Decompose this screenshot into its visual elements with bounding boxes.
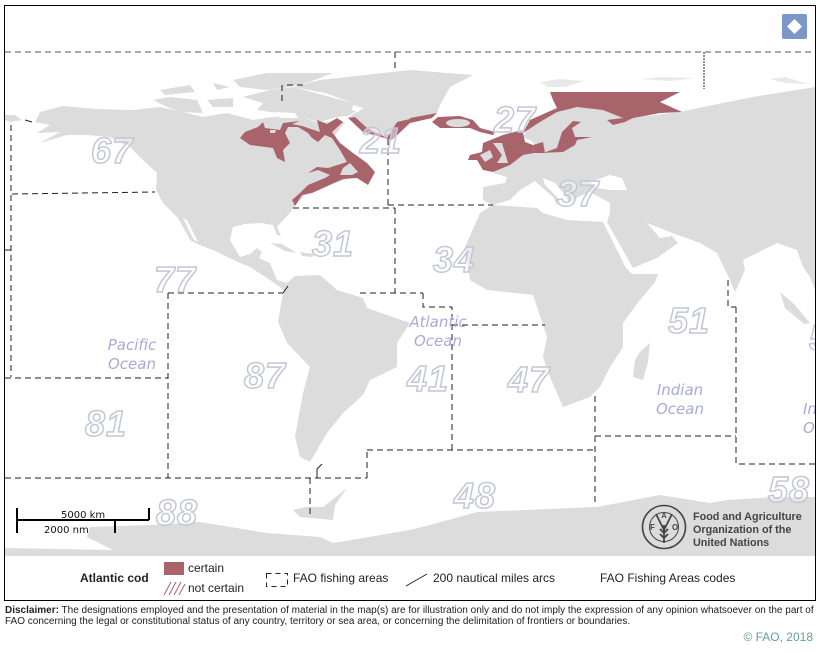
legend title: Atlantic cod xyxy=(80,571,149,585)
Melville Island xyxy=(213,83,230,90)
FAO logo xyxy=(642,506,802,549)
fishing area codes: 81 xyxy=(85,403,127,444)
Antarctica xyxy=(5,495,815,556)
Hudson Bay islands xyxy=(270,130,276,133)
fishing area codes: 51 xyxy=(668,300,710,341)
legend: not certain: not certain xyxy=(188,581,244,595)
copyright: © FAO, 2018 xyxy=(743,630,813,644)
faint Arctic islands xyxy=(540,77,808,87)
cod: Iceland and Faroe ring xyxy=(432,116,495,135)
Black Sea xyxy=(590,175,627,190)
FAO emblem: O xyxy=(672,523,678,532)
Arctic island group xyxy=(207,98,233,107)
South America xyxy=(278,275,410,462)
fishing area codes: 21 xyxy=(359,120,402,161)
ocean labels xyxy=(108,313,823,437)
fishing area codes: 47 xyxy=(507,359,551,400)
land masses xyxy=(5,70,815,556)
fishing area codes: 31 xyxy=(312,223,354,264)
North America xyxy=(35,106,358,292)
Africa xyxy=(465,205,658,407)
fishing area codes: 27 xyxy=(493,99,537,140)
cod: Irminger band xyxy=(410,113,437,123)
legend: area codes: FAO Fishing Areas codes xyxy=(600,571,735,585)
disclaimer: FAO concerning the legal or constitutional status of any country, territory or sea area, or concerning the delimitation of frontiers or boundaries. xyxy=(5,616,630,627)
cod: Greenland coast xyxy=(348,117,410,140)
fishing area codes: 67 xyxy=(91,130,134,171)
FAO emblem xyxy=(642,506,686,548)
fishing area codes: 48 xyxy=(453,475,496,516)
cod: Baltic Sea xyxy=(540,121,592,153)
legend: certain: certain xyxy=(188,561,224,575)
Baffin Island and Baffin Bay region xyxy=(243,87,363,122)
legend: 200 nautical miles arcs: 200 nautical miles arcs xyxy=(433,571,555,585)
FAO emblem: F xyxy=(650,523,655,532)
Atlantic cod range xyxy=(240,92,682,206)
Madagascar xyxy=(633,343,650,380)
Ellesmere Island xyxy=(233,73,333,90)
Greenland xyxy=(293,70,473,138)
scale bar xyxy=(17,508,149,536)
Arctic inlets xyxy=(275,112,298,118)
fishing area codes: 87 xyxy=(244,355,287,396)
cod: Skagerrak xyxy=(533,142,545,153)
FAO name: Food and Agriculture xyxy=(693,511,802,523)
FAO name: Organization of the xyxy=(693,524,791,536)
FAO name: United Nations xyxy=(693,537,769,549)
ocean labels: Pacific xyxy=(108,336,157,354)
cod: North Sea and British shelf xyxy=(468,130,534,172)
Gulf of California xyxy=(183,218,198,242)
ocean labels: Ocean xyxy=(108,355,156,373)
Sumatra xyxy=(780,292,810,324)
Great Britain xyxy=(493,143,508,163)
Cuba and Hispaniola xyxy=(270,243,297,253)
world map xyxy=(4,52,823,556)
Iceland xyxy=(446,119,470,127)
Banks Island xyxy=(160,85,195,95)
FAO emblem: A xyxy=(661,511,667,520)
legend: certain xyxy=(164,561,224,575)
islands within cod range xyxy=(270,119,508,175)
disclaimer xyxy=(5,605,814,627)
cod: Norwegian coast and Barents Sea xyxy=(523,92,682,133)
ocean labels: Ocean xyxy=(414,332,462,350)
Victoria Island xyxy=(153,97,203,113)
scale bar: 5000 km xyxy=(61,510,105,521)
fishing area codes: 58 xyxy=(768,469,810,510)
fishing area codes: 88 xyxy=(156,492,198,533)
disclaimer: Disclaimer: The designations employed and the presentation of material in the map(s) are for illustration only and do not imply the expression of any opinion whatsoever on the part of xyxy=(5,605,814,616)
FAO name xyxy=(693,511,802,549)
FAO fishing area boundaries xyxy=(4,52,815,517)
fishing area codes: 37 xyxy=(557,173,600,214)
legend xyxy=(80,561,735,595)
Alaska tip xyxy=(5,115,22,122)
Ireland xyxy=(480,150,493,162)
scale bar: 2000 nm xyxy=(44,525,89,536)
fishing area codes: 41 xyxy=(406,358,449,399)
fishing area codes xyxy=(85,99,823,533)
white seas xyxy=(183,105,627,242)
cod: Hudson Bay and Northwest Atlantic xyxy=(240,118,375,206)
fishing area codes: 77 xyxy=(154,259,197,300)
ocean labels: Ocean xyxy=(656,400,704,418)
legend: FAO fishing areas: FAO fishing areas xyxy=(293,571,388,585)
Antarctic Peninsula xyxy=(293,488,347,520)
Eurasia xyxy=(483,87,815,292)
icon: blue diamond button xyxy=(782,14,807,39)
Newfoundland xyxy=(340,163,358,175)
ocean labels: Atlantic xyxy=(408,313,467,331)
ocean labels: Indian xyxy=(657,381,703,399)
fishing area codes: 34 xyxy=(433,239,475,280)
